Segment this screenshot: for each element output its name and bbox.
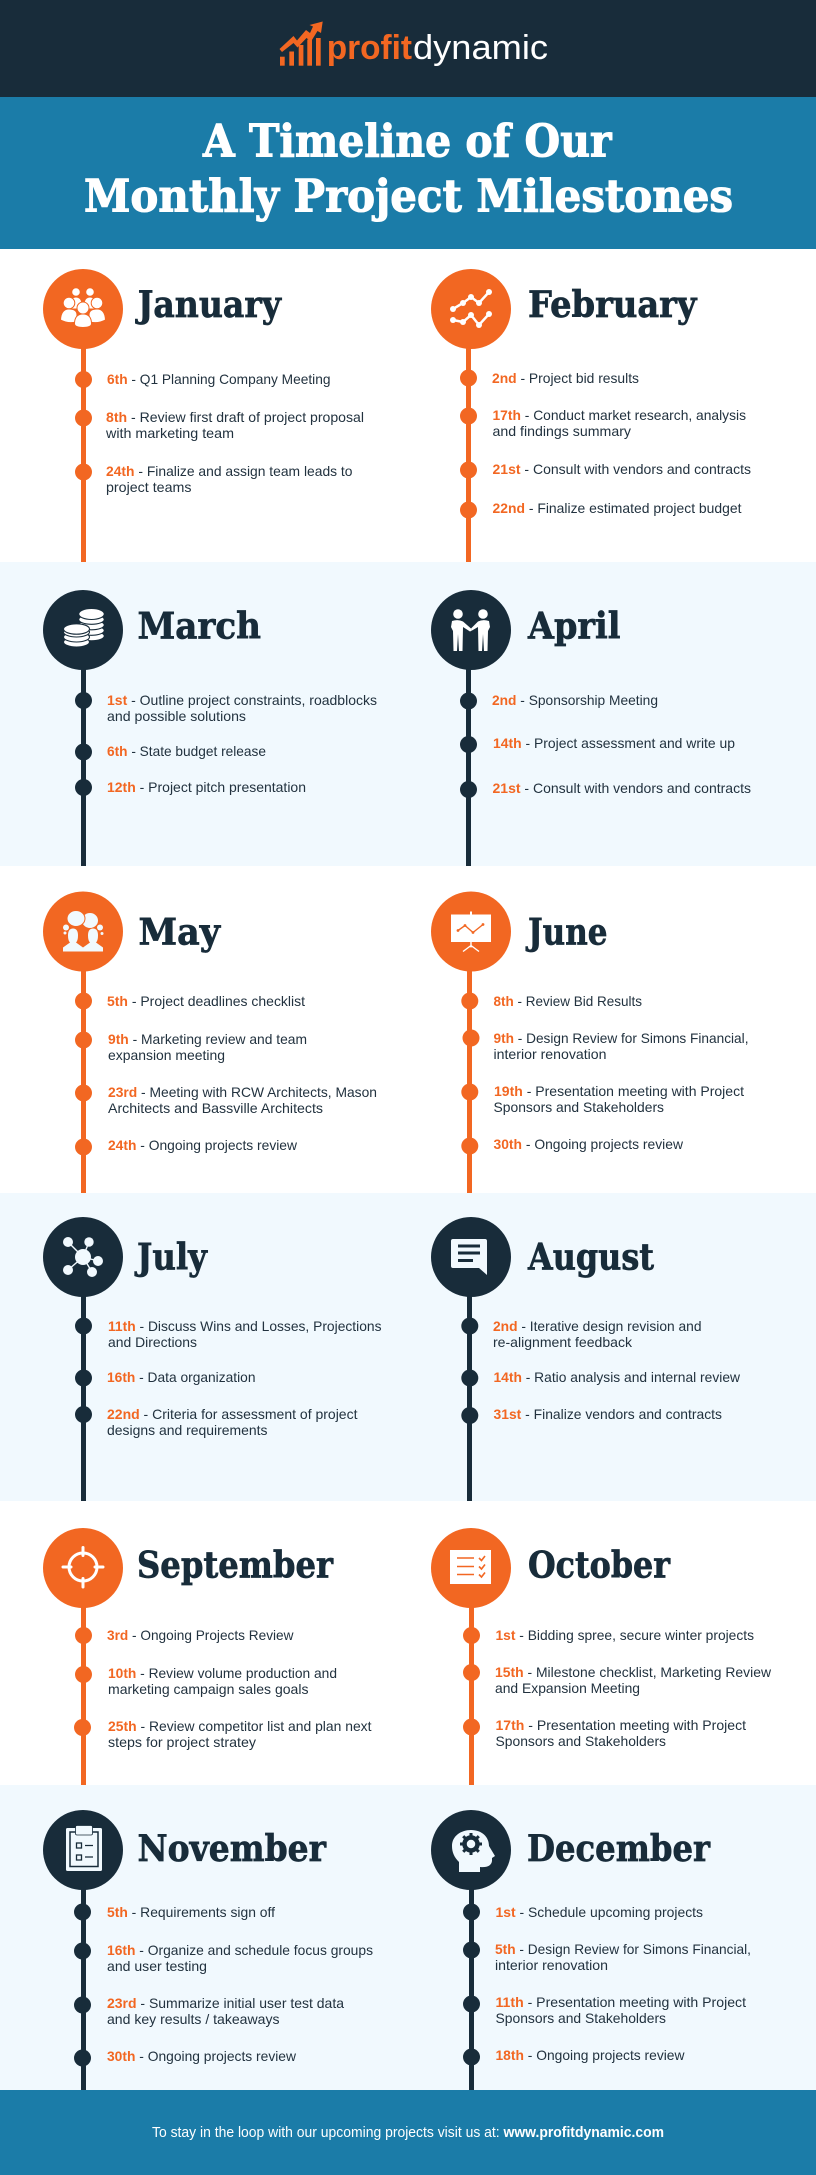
milestone: 1st [75, 692, 377, 724]
milestone: 24th: project teams [106, 479, 192, 495]
milestone: 21st: 21st - Consult with vendors and contracts [492, 461, 751, 477]
panel: June [431, 892, 748, 1193]
icon: team of people [43, 269, 123, 349]
icon: clipboard [43, 1810, 123, 1890]
milestone: 2nd: 2nd - Sponsorship Meeting [492, 692, 658, 708]
timeline line [81, 1880, 86, 2090]
milestone: 9th: interior renovation [494, 1046, 606, 1062]
milestone: 16th: 16th - Organize and schedule focus groups [107, 1942, 373, 1958]
milestone: 23rd: 23rd - Meeting with RCW Architects, Mason [108, 1084, 377, 1100]
milestone: 6th: 6th - Q1 Planning Company Meeting [107, 371, 330, 387]
milestone: 25th [74, 1718, 372, 1750]
heading: February: February [528, 284, 697, 326]
milestone: 17th [460, 407, 746, 439]
title band [0, 97, 816, 249]
heading: October: October [528, 1544, 671, 1586]
milestone: 2nd: re-alignment feedback [493, 1334, 633, 1350]
timeline line [81, 340, 86, 562]
milestone: 10th: marketing campaign sales goals [108, 1681, 308, 1697]
milestone: 19th: Sponsors and Stakeholders [494, 1099, 664, 1115]
milestone: 23rd: 23rd - Summarize initial user test data [107, 1995, 344, 2011]
milestone: 8th: 8th - Review Bid Results [494, 993, 642, 1009]
milestone: 15th [463, 1664, 772, 1696]
row band: March and April background [0, 562, 816, 866]
panel: September [43, 1528, 372, 1785]
logo wordmark: profit [327, 29, 412, 67]
milestone: 14th: 14th - Ratio analysis and internal review [494, 1369, 741, 1385]
milestone: 22nd: designs and requirements [107, 1422, 268, 1438]
icon: speech note [431, 1217, 511, 1297]
footer text: To stay in the loop with our upcoming projects visit us at: www.profitdynamic.com [152, 2124, 664, 2141]
icon: two people with speech bubbles [43, 892, 123, 972]
milestone: 11th [75, 1318, 382, 1350]
milestone: 8th: with marketing team [105, 425, 234, 441]
milestone: 5th: 5th - Project deadlines checklist [107, 993, 305, 1009]
milestone: 9th: expansion meeting [108, 1047, 225, 1063]
row band: July and August background [0, 1193, 816, 1501]
milestone: 8th: 8th - Review first draft of project proposal [106, 409, 364, 425]
heading: March: March [138, 606, 261, 648]
milestone: 16th: 16th - Data organization [107, 1369, 256, 1385]
milestone: 19th [461, 1083, 744, 1115]
heading: August: August [527, 1236, 654, 1278]
milestone: 17th: Sponsors and Stakeholders [496, 1733, 666, 1749]
milestone: 11th: and Directions [108, 1334, 197, 1350]
title: Monthly Project Milestones [84, 170, 733, 222]
milestone: 17th [463, 1717, 746, 1749]
milestone: 24th [75, 463, 353, 495]
milestone: 17th: 17th - Presentation meeting with Project [496, 1717, 746, 1733]
icon: handshake of two people [431, 590, 511, 670]
milestone: 24th: 24th - Ongoing projects review [108, 1137, 298, 1153]
milestone: 11th: Sponsors and Stakeholders [496, 2010, 666, 2026]
panel: January [43, 269, 364, 562]
milestone: 19th: 19th - Presentation meeting with Project [494, 1083, 744, 1099]
milestone: 3rd: 3rd - Ongoing Projects Review [107, 1627, 294, 1643]
timeline line [81, 1600, 86, 1785]
milestone: 15th: 15th - Milestone checklist, Marketing Review [495, 1664, 772, 1680]
heading: April: April [527, 606, 620, 648]
icon: presentation board [431, 892, 511, 972]
icon: head with gear [431, 1810, 511, 1890]
milestone: 23rd [74, 1995, 344, 2027]
row band: November and December background [0, 1785, 816, 2090]
panel: February [431, 269, 751, 562]
milestone: 6th: 6th - State budget release [107, 743, 266, 759]
milestone: 9th [462, 1030, 748, 1062]
heading: December: December [527, 1828, 711, 1870]
logo icon: bars and rising arrow [280, 22, 323, 66]
milestone: 11th [463, 1994, 746, 2026]
timeline line [469, 1880, 474, 2090]
icon: network nodes [43, 1217, 123, 1297]
milestone: 30th: 30th - Ongoing projects review [494, 1136, 684, 1152]
timeline line [81, 660, 86, 866]
milestone: 17th: and findings summary [492, 423, 631, 439]
milestone: 8th [75, 409, 364, 441]
milestone: 22nd: 22nd - Criteria for assessment of project [107, 1406, 358, 1422]
heading: September: September [137, 1544, 334, 1586]
milestone: 10th: 10th - Review volume production and [108, 1665, 337, 1681]
milestone: 9th: 9th - Marketing review and team [108, 1031, 307, 1047]
milestone: 2nd [461, 1318, 702, 1350]
panel: October [431, 1528, 772, 1785]
panel: August [431, 1217, 741, 1501]
heading: May: May [138, 912, 221, 954]
panel: July [43, 1217, 382, 1501]
panel: November [43, 1810, 373, 2090]
logo: profitdynamic: dynamic [413, 29, 548, 67]
heading: January: January [135, 284, 282, 326]
icon: line charts [431, 269, 511, 349]
timeline line [467, 1290, 472, 1501]
milestone: 15th: and Expansion Meeting [495, 1680, 640, 1696]
milestone: 23rd [75, 1084, 377, 1116]
milestone: 12th: 12th - Project pitch presentation [107, 779, 306, 795]
milestone: 16th [74, 1942, 373, 1974]
milestone: 17th: 17th - Conduct market research, analysis [492, 407, 746, 423]
footer band [0, 2090, 816, 2175]
milestone: 1st: 1st - Bidding spree, secure winter projects [496, 1627, 754, 1643]
milestone: 31st: 31st - Finalize vendors and contracts [494, 1406, 722, 1422]
timeline line [81, 960, 86, 1193]
timeline line [81, 1290, 86, 1501]
milestone: 22nd [75, 1406, 358, 1438]
panel: March [43, 590, 377, 866]
milestone: 14th: 14th - Project assessment and write up [493, 735, 735, 751]
milestone: 11th: 11th - Presentation meeting with Project [496, 1994, 746, 2010]
logo: profitdynamic [280, 22, 548, 67]
milestone: 11th: 11th - Discuss Wins and Losses, Projections [108, 1318, 382, 1334]
panel: April [431, 590, 751, 866]
milestone: 5th: 5th - Design Review for Simons Financial, [495, 1941, 751, 1957]
milestone: 2nd: 2nd - Iterative design revision and [493, 1318, 702, 1334]
milestone: 21st: 21st - Consult with vendors and contracts [492, 780, 751, 796]
milestone: 5th: interior renovation [495, 1957, 608, 1973]
timeline line [467, 960, 472, 1193]
panel: December [431, 1810, 751, 2090]
milestone: 9th [75, 1031, 307, 1063]
milestone: 9th: 9th - Design Review for Simons Financial, [494, 1030, 748, 1046]
title [84, 114, 733, 222]
timeline line [466, 340, 471, 562]
milestone: 30th: 30th - Ongoing projects review [107, 2048, 297, 2064]
header band with logo [0, 0, 816, 97]
timeline line [469, 1600, 474, 1785]
milestone: 5th: 5th - Requirements sign off [107, 1904, 275, 1920]
milestone: 18th: 18th - Ongoing projects review [496, 2047, 685, 2063]
heading: June: June [525, 912, 608, 954]
milestone: 16th: and user testing [107, 1958, 207, 1974]
milestone: 23rd: Architects and Bassville Architects [108, 1100, 323, 1116]
milestone: 1st: 1st - Schedule upcoming projects [496, 1904, 703, 1920]
icon: coin stacks [43, 590, 123, 670]
heading: July: July [134, 1236, 208, 1278]
milestone: 5th [463, 1941, 751, 1973]
milestone: 25th: 25th - Review competitor list and plan next [108, 1718, 372, 1734]
milestone: 2nd: 2nd - Project bid results [492, 370, 639, 386]
timeline line [466, 660, 471, 866]
heading: November: November [138, 1828, 327, 1870]
milestone: 22nd: 22nd - Finalize estimated project budget [492, 500, 742, 516]
milestone: 1st: and possible solutions [107, 708, 246, 724]
milestone: 24th: 24th - Finalize and assign team leads to [106, 463, 353, 479]
milestone: 23rd: and key results / takeaways [107, 2011, 280, 2027]
panel: May [43, 892, 377, 1193]
milestone: 25th: steps for project stratey [108, 1734, 256, 1750]
milestone: 1st: 1st - Outline project constraints, roadblocks [107, 692, 377, 708]
milestone: 10th [75, 1665, 337, 1697]
icon: crosshair target [43, 1528, 123, 1608]
title: A Timeline of Our [202, 114, 613, 167]
icon: checklist [431, 1528, 511, 1608]
